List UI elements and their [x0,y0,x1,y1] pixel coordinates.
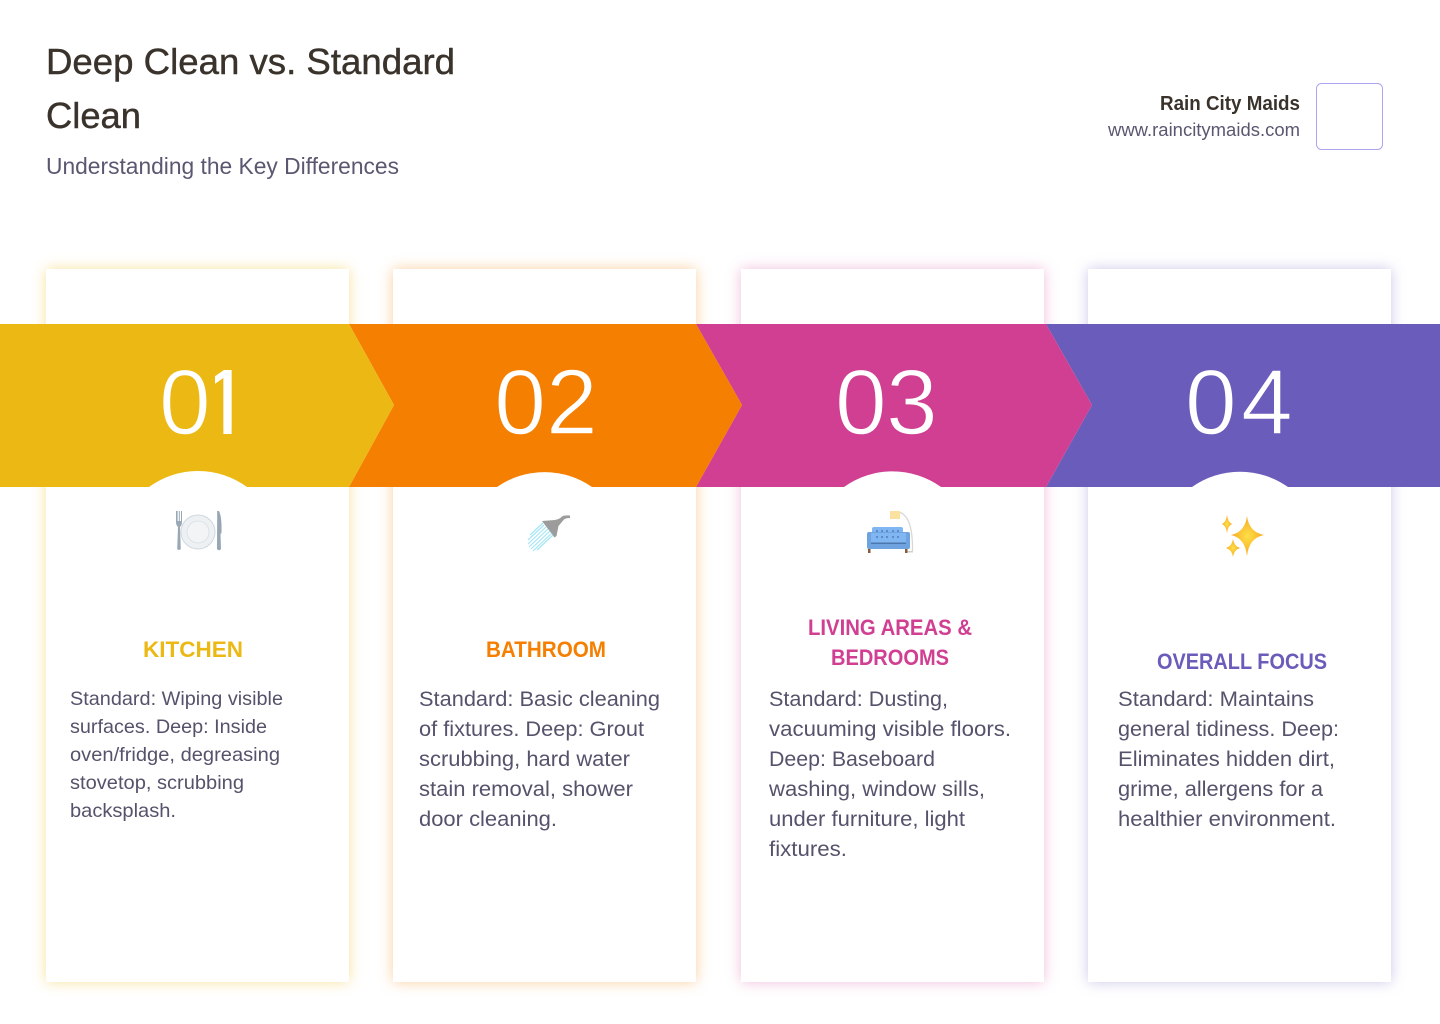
body text: general tidiness. Deep: [1118,718,1339,741]
body text: stovetop, scrubbing [70,772,244,794]
panel: living areas and bedrooms [741,269,1044,982]
icon badge: overall focus [1192,472,1288,557]
body text: Deep: Baseboard [769,748,935,771]
heading: OVERALL FOCUS [1157,649,1327,674]
icon: sparkles [1222,515,1264,557]
title: Clean [46,95,141,136]
brand name: Rain City Maids [1160,93,1300,115]
icon badge: kitchen [149,471,247,550]
panel: bathroom [393,269,696,982]
body text: Standard: Maintains [1118,688,1314,711]
body text: washing, window sills, [768,778,985,801]
body text: scrubbing, hard water [419,748,630,771]
panel: kitchen [46,269,349,982]
arrow 04 [1046,324,1440,487]
icon badge: living areas [844,471,941,553]
icon: plate and cutlery [176,511,222,550]
body text: vacuuming visible floors. [769,718,1011,741]
number 04: 04 [1185,350,1293,454]
body text [70,688,283,822]
heading [808,615,972,670]
icon: sofa and lamp [867,511,913,553]
body text: under furniture, light [769,808,965,831]
card [741,269,1044,982]
heading: KITCHEN [143,637,243,662]
number 01: 1 [200,350,252,454]
body text: grime, allergens for a [1118,778,1323,801]
title [46,41,455,136]
body text: surfaces. Deep: Inside [70,716,267,738]
card [46,269,349,982]
number 03: 03 [835,350,938,454]
body text: Standard: Dusting, [769,688,948,711]
heading: BATHROOM [486,637,606,662]
arrow 01 [0,324,394,487]
body text [1118,688,1339,831]
icon badge: bathroom [497,472,592,551]
body text: backsplash. [70,800,176,822]
arrow 02 [349,324,742,487]
card [393,269,696,982]
subtitle: Understanding the Key Differences [46,153,399,179]
body text: Standard: Wiping visible [70,688,283,710]
number 01 [163,370,232,434]
heading: BEDROOMS [831,645,949,670]
icon: shower head [528,515,570,551]
body text: oven/fridge, degreasing [70,744,280,766]
body text: of fixtures. Deep: Grout [419,718,644,741]
body text [768,688,1011,861]
body text: stain removal, shower [419,778,633,801]
number 02: 02 [494,350,598,454]
body text: Standard: Basic cleaning [419,688,660,711]
panel: overall focus [1088,269,1391,982]
card [1088,269,1391,982]
number 01: 0 [159,350,211,454]
body text: Eliminates hidden dirt, [1118,748,1335,771]
brand block [1107,84,1382,150]
body text [419,688,660,831]
logo placeholder [1316,84,1382,150]
body text: healthier environment. [1118,808,1336,831]
heading: LIVING AREAS & [808,615,972,640]
arrow 03 [696,324,1092,487]
title: Deep Clean vs. Standard [46,41,455,82]
brand url: www.raincitymaids.com [1107,120,1300,140]
body text: fixtures. [769,838,847,861]
body text: door cleaning. [419,808,557,831]
